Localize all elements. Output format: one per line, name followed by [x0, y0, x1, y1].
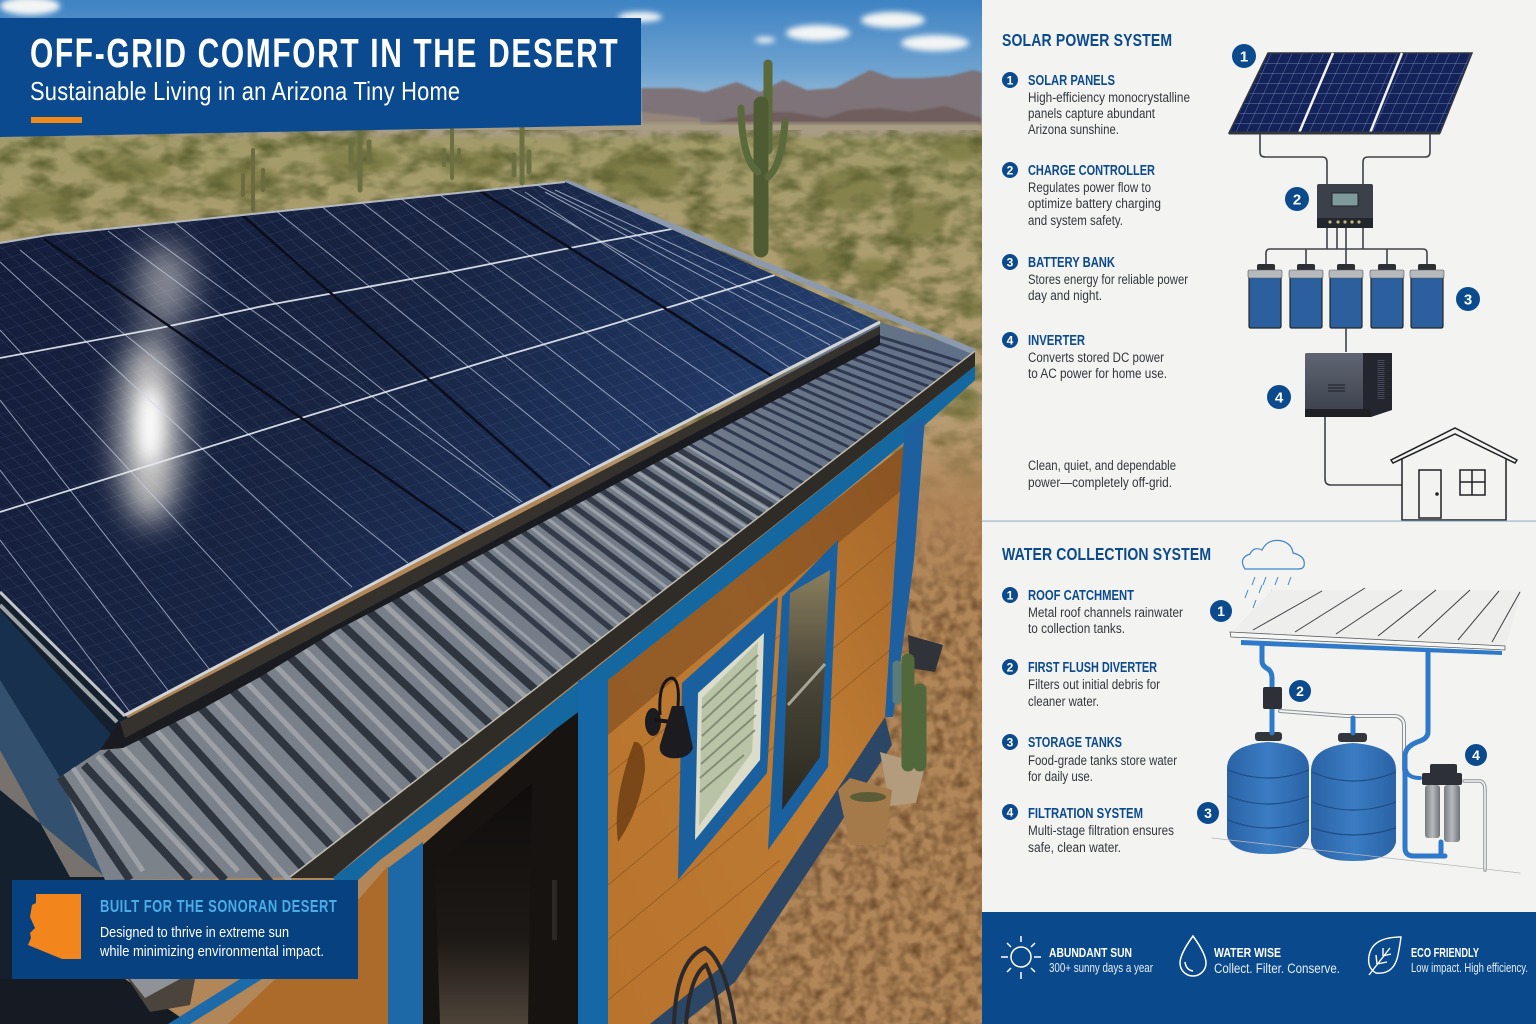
item: inverter: to AC power for home use.: [1028, 366, 1167, 381]
wood wall: [0, 418, 925, 1024]
eave trim: [290, 350, 975, 892]
item: first flush diverter: Filters out initial debris for: [1028, 677, 1160, 692]
icon: Arizona map: [28, 894, 81, 959]
number badges: 4: [1472, 747, 1480, 763]
number badges: 2: [1296, 683, 1304, 699]
icon: charge controller: [1317, 184, 1373, 228]
heading: WATER COLLECTION SYSTEM: [1002, 544, 1211, 564]
right panel background: [982, 0, 1536, 912]
item: charge controller: optimize battery charging: [1028, 196, 1161, 211]
rib shadows large: [60, 576, 537, 890]
wall base strip: [650, 717, 892, 1024]
item: charge controller: [1002, 162, 1161, 228]
item: eco friendly: [1369, 937, 1528, 975]
item: storage tanks: for daily use.: [1028, 769, 1093, 784]
lower left details: [0, 979, 190, 1024]
title banner: [0, 18, 641, 137]
item: solar panels: [1002, 72, 1190, 137]
potted cactus and pots: [838, 635, 943, 845]
item: solar panels: panels capture abundant: [1028, 106, 1155, 121]
wiring to batteries: [1266, 228, 1427, 265]
saguaro cacti: [243, 64, 785, 250]
number badges: [1232, 44, 1480, 409]
desert scrubland: [0, 125, 982, 505]
gutter: [1241, 640, 1502, 655]
item: abundant sun: ABUNDANT SUN: [1049, 945, 1132, 960]
number badges: 4: [1275, 390, 1284, 406]
callout: Sonoran desert: BUILT FOR THE SONORAN DESERT: [100, 897, 337, 917]
item: solar panels: Arizona sunshine.: [1028, 122, 1119, 137]
distant mountains: [641, 70, 982, 130]
item: water wise: WATER WISE: [1214, 945, 1281, 960]
item: filtration system: safe, clean water.: [1028, 840, 1121, 855]
number badges: 1: [1217, 603, 1225, 619]
item: roof catchment: ROOF CATCHMENT: [1028, 588, 1134, 604]
metal roof: [0, 182, 975, 1024]
wiring from panels to controller: [1260, 134, 1430, 184]
icon: inverter: [1305, 353, 1392, 417]
accent bar: [31, 117, 82, 123]
item: eco friendly: ECO FRIENDLY: [1411, 945, 1479, 960]
item: water wise: Collect. Filter. Conserve.: [1214, 961, 1340, 976]
title text: OFF-GRID COMFORT IN THE DESERT: [30, 30, 618, 76]
item: battery bank: Stores energy for reliable power: [1028, 272, 1188, 287]
wire inverter to house: [1325, 417, 1402, 485]
shadow under array frame: [100, 332, 880, 750]
subtitle: Sustainable Living in an Arizona Tiny Home: [30, 77, 460, 106]
item: storage tanks: Food-grade tanks store water: [1028, 753, 1177, 768]
front corner post: [578, 680, 608, 1024]
item: water wise: [1180, 936, 1340, 976]
clouds: [0, 0, 969, 51]
item: charge controller: and system safety.: [1028, 213, 1123, 228]
right corner post: [885, 418, 925, 717]
item: roof catchment: to collection tanks.: [1028, 621, 1125, 636]
number badges: 3: [1464, 292, 1472, 308]
icon: sun: [1001, 936, 1041, 979]
sun glare: [118, 243, 193, 525]
panel: water collection system: [1002, 544, 1211, 855]
solar array on roof: [0, 182, 880, 738]
item: battery bank: day and night.: [1028, 288, 1102, 303]
item: storage tanks: STORAGE TANKS: [1028, 735, 1122, 751]
rib shadows medium: [429, 442, 776, 675]
tanks: [1227, 732, 1396, 861]
item: first flush diverter: FIRST FLUSH DIVERTER: [1028, 660, 1157, 676]
wire battery to inverter: [1345, 328, 1347, 352]
long cell lines: [0, 185, 860, 712]
item: storage tanks: [1002, 734, 1177, 784]
item: inverter: Converts stored DC power: [1028, 350, 1164, 365]
array frame: [120, 326, 880, 738]
left roof edge layers: [0, 594, 128, 979]
icon: rain cloud: [1242, 540, 1304, 608]
gravel ground: [125, 413, 982, 1024]
item: inverter: INVERTER: [1028, 333, 1085, 349]
item: roof catchment: 1: [1007, 588, 1014, 602]
number badges: 2: [1293, 192, 1301, 208]
item: battery bank: 3: [1007, 256, 1014, 270]
window left: [678, 597, 778, 880]
lower left wood: [228, 866, 388, 1024]
item: inverter: 4: [1007, 334, 1014, 348]
panel seams: [44, 191, 775, 532]
heading: SOLAR POWER SYSTEM: [1002, 30, 1172, 50]
rib highlights medium: [436, 437, 783, 670]
note: power—completely off-grid.: [1028, 475, 1172, 490]
number badges: [1197, 600, 1487, 824]
item: solar panels: SOLAR PANELS: [1028, 73, 1115, 89]
number badges: 3: [1204, 805, 1212, 821]
callout: Sonoran desert: [12, 880, 358, 979]
number badges: 1: [1240, 48, 1248, 66]
icon: first flush diverter: [1263, 687, 1282, 709]
icon: solar array: [1229, 53, 1472, 133]
solar diagram: [1229, 44, 1517, 521]
icon: filter: [1422, 764, 1462, 842]
note: Clean, quiet, and dependable: [1028, 458, 1176, 473]
item: abundant sun: 300+ sunny days a year: [1049, 961, 1153, 975]
icon: battery bank: [1248, 264, 1444, 328]
door post: [388, 842, 423, 1024]
item: filtration system: 4: [1007, 806, 1014, 820]
item: solar panels: High-efficiency monocrystalline: [1028, 90, 1190, 105]
pipes: [1212, 645, 1520, 873]
panel: solar power system: [1002, 30, 1190, 490]
sky: [0, 0, 982, 130]
item: filtration system: FILTRATION SYSTEM: [1028, 806, 1143, 822]
window right: [768, 540, 838, 850]
icon: water drop: [1180, 936, 1206, 976]
item: first flush diverter: cleaner water.: [1028, 694, 1099, 709]
note: [1028, 458, 1176, 490]
icon: house: [1391, 428, 1517, 521]
item: solar panels: 1: [1007, 74, 1014, 88]
icon: leaf: [1369, 937, 1401, 975]
item: battery bank: [1002, 254, 1188, 303]
item: inverter: [1002, 332, 1167, 381]
item: charge controller: CHARGE CONTROLLER: [1028, 163, 1155, 179]
item: storage tanks: 3: [1007, 736, 1014, 750]
rib highlights large: [73, 567, 550, 881]
item: roof catchment: [1002, 587, 1183, 636]
callout: Sonoran desert: Designed to thrive in extreme sun: [100, 924, 289, 941]
item: charge controller: 2: [1007, 164, 1014, 178]
item: first flush diverter: 2: [1007, 660, 1014, 674]
corrugated sheet: [60, 322, 975, 880]
garden wheel: [674, 948, 735, 1024]
water diagram: [1197, 540, 1522, 873]
desert photo background: [0, 0, 984, 1024]
cross bars: [0, 229, 775, 512]
item: charge controller: Regulates power flow to: [1028, 180, 1151, 195]
icon: metal roof: [1230, 588, 1522, 650]
item: battery bank: BATTERY BANK: [1028, 255, 1115, 271]
item: filtration system: Multi-stage filtration ensures: [1028, 823, 1174, 838]
rib shadows fine: [677, 335, 965, 500]
item: roof catchment: Metal roof channels rainwater: [1028, 605, 1183, 620]
item: abundant sun: [1001, 936, 1153, 979]
item: filtration system: [1002, 804, 1174, 855]
wall lamp: [617, 678, 693, 842]
callout: Sonoran desert: while minimizing environmental impact.: [99, 943, 324, 960]
door glass: [438, 942, 529, 1024]
door dark wall behind trim: [423, 712, 578, 1024]
silver roof edge: [565, 182, 975, 352]
footer band: [982, 912, 1536, 1024]
item: first flush diverter: [1002, 659, 1160, 709]
